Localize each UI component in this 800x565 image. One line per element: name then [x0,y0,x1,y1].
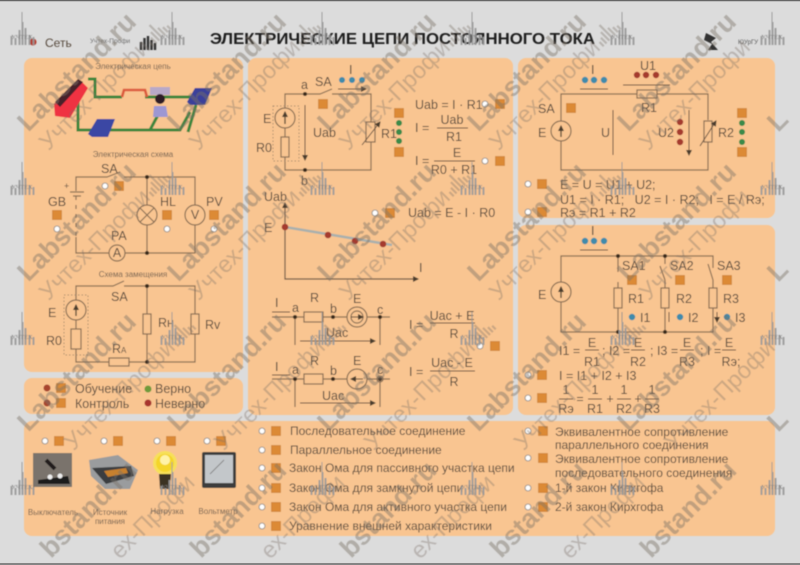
active section circuit 1: R [310,291,319,305]
parallel circuit: SA3 [717,259,741,273]
parallel circuit: R1 [628,292,644,306]
watermark overlay: Labstand: bstand.ru [484,455,592,563]
active section circuit 2 [272,354,473,407]
external characteristic graph: Uab [264,190,287,204]
component: switch: Выключатель [28,508,78,517]
current formulas: Rэ; [722,355,740,369]
logo watermarks: УЧТЕХ [311,184,333,191]
component: load lamp [150,436,184,516]
active section circuit 1: I [275,296,278,310]
header left: network indicator: Учтех-Профи [90,38,131,45]
logo watermarks: УЧТЕХ [611,184,633,191]
current formulas: R3 [679,355,695,369]
active section circuit 2: Uac [322,389,344,403]
current formulas: + [634,392,642,406]
watermark overlay: Учтех-Профи: Учтех-Профи [184,34,305,155]
watermark overlay: Учтех-Профи: Учтех-Профи [484,34,605,155]
panel: series connection [518,58,775,220]
logo watermarks: УЧТЕХ [161,34,183,41]
watermark overlay: Labstand: Labstand.ru [11,156,142,287]
current formulas: E [725,336,733,350]
current formulas: R1 [584,355,600,369]
logo watermarks: УЧТЕХ [461,484,483,491]
topics list left: Закон Ома для активного участка цепи [289,500,507,514]
electric circuit picture: Электрическая цепь [95,62,171,71]
topics list right: Эквивалентное сопротивление [555,425,729,439]
topics list right [525,425,732,514]
component: voltmeter: Вольтметр [198,507,238,516]
watermark overlay: Labstand: Labstand.ru [311,306,442,437]
topics list left: Закон Ома для замкнутой цепи [289,481,463,495]
watermark overlay: Учтех-Профи: ех-Профи [255,469,350,564]
active section circuit 2: Uac - E [431,356,473,370]
series circuit: SA [538,102,555,116]
formulas for load circuit: I = [415,121,429,135]
series circuit: E [538,126,546,140]
watermark overlay: Labstand: Labstand.ru [11,6,142,137]
electric schematic: PV [206,195,223,209]
equivalent schematic: E [48,306,56,320]
external characteristic graph: I [419,261,422,275]
current formulas: R3 [644,402,660,416]
logo watermarks: УЧТЕХ [11,334,33,341]
series formulas: U1 = I · R1; U2 = I · R2; I = E / Rэ; [560,193,765,207]
header left: network indicator: Сеть [45,36,72,50]
topics list right: параллельного соединения [555,438,709,452]
formulas for load circuit: Uab [441,113,464,127]
topics list left [259,424,515,533]
active section circuit 1: b [330,302,337,316]
watermark overlay: Учтех-Профи: Учтех-Профи [359,334,480,455]
logo watermarks: УЧТЕХ [761,184,783,191]
watermark overlay: Labstand: Labstand.ru [311,6,442,137]
logo watermarks: УЧТЕХ [761,334,783,341]
logo watermarks: УЧТЕХ [11,34,33,41]
active section circuit 2: b [330,364,337,378]
active section circuit 1 [272,291,500,350]
panel: parallel connection [518,224,775,416]
watermark overlay: Учтех-Профи: Учтех-Профи [634,34,755,155]
circuit with load R1: E [263,112,271,126]
circuit with load R1: R1 [381,127,397,141]
logo watermarks: УЧТЕХ [161,184,183,191]
current formulas: 1 [649,383,656,397]
panel: series circuit and Ohm laws [248,58,513,415]
logo watermarks: УЧТЕХ [461,34,483,41]
current formulas: 1 [563,383,570,397]
current formulas: = [576,392,584,406]
parallel circuit: SA1 [622,259,646,273]
topics list left: Уравнение внешней характеристики [289,519,492,533]
component: voltmeter [198,436,238,516]
series formulas: Rэ = R1 + R2 [560,206,636,220]
current formulas: E [588,336,596,350]
electric circuit picture [54,62,212,137]
logo watermarks: УЧТЕХ [461,334,483,341]
electric schematic: SA [101,162,118,176]
active section circuit 1: E [353,292,361,306]
equivalent schematic: SA [111,290,128,304]
circuit with load R1: SA [315,75,332,89]
current formulas: ; I = [700,344,721,358]
watermark overlay: Labstand: bstand.ru [34,455,142,563]
parallel circuit: I [591,224,594,238]
series formulas [525,178,765,220]
logo watermarks: УЧТЕХ [611,334,633,341]
active section circuit 2: I = [409,365,423,379]
circuit with load R1 [256,63,404,188]
header left: network indicator [30,36,155,50]
panel: mode legend: Верно [155,382,191,396]
watermark overlay: Labstand: Labstand.ru [461,306,592,437]
logo watermarks: УЧТЕХ [311,334,333,341]
electric schematic: GB [48,195,66,209]
active section circuit 2: R [310,354,319,368]
panel: mode legend: Обучение [75,382,132,396]
component: switch [28,436,78,517]
panel: mode legend [24,378,243,414]
logo watermarks: УЧТЕХ [611,34,633,41]
logo watermarks: УЧТЕХ [311,484,333,491]
watermark overlay: Labstand: Labstand.ru [311,156,442,287]
formulas for load circuit: E [453,146,461,160]
logo watermarks: УЧТЕХ [611,484,633,491]
logo watermarks: УЧТЕХ [461,184,483,191]
topics list left: Последовательное соединение [290,424,466,438]
electric schematic: Электрическая схема [93,150,174,159]
external characteristic graph: E [264,221,272,235]
circuit with load R1: b [301,174,308,188]
electric schematic: PA [111,229,127,243]
logo watermarks: УЧТЕХ [311,34,333,41]
watermark overlay: Labstand: Labstand.ru [161,156,292,287]
logo watermarks: УЧТЕХ [161,484,183,491]
panel: mode legend: Неверно [155,397,205,411]
formulas for load circuit: R1 [446,130,462,144]
topics list left: Параллельное соединение [290,443,442,457]
watermark overlay: Labstand: Labstand.ru [161,306,292,437]
equivalent schematic: Rн [158,316,174,330]
current formulas [525,336,740,416]
current formulas: Rэ [558,402,574,416]
title: ЭЛЕКТРИЧЕСКИЕ ЦЕПИ ПОСТОЯННОГО ТОКА [210,31,595,48]
parallel circuit: R3 [723,292,739,306]
watermark overlay: Учтех-Профи: Учтех-Профи [334,34,455,155]
watermark overlay: Labstand: Labstand.ru [461,156,592,287]
active section circuit 1: Uac + E [430,309,474,323]
logo watermarks: УЧТЕХ [11,484,33,491]
logo watermarks: УЧТЕХ [11,184,33,191]
external characteristic graph [264,190,495,279]
topics list left: Закон Ома для пассивного участка цепи [289,461,515,475]
circuit with load R1: R0 [256,141,272,155]
equivalent schematic: RA [112,342,127,356]
series circuit: R2 [718,126,734,140]
current formulas: 1 [592,383,599,397]
parallel circuit: E [538,288,546,302]
current formulas: ; I3 = [650,344,678,358]
current formulas: R2 [630,355,646,369]
watermark overlay: Labstand: Labstand.ru [461,6,592,137]
component: power source: питания [95,517,125,526]
series circuit: I [591,63,594,77]
watermark overlay: Учтех-Профи: Учтех-Профи [659,334,780,455]
formulas for load circuit [415,98,504,371]
current formulas: ; I2 = [602,344,630,358]
active section circuit 2: I [275,360,278,374]
electric schematic: + [64,181,69,191]
watermark overlay: Учтех-Профи: Учтех-Профи [484,184,605,305]
panel: mode legend: Контроль [75,397,129,411]
watermark overlay: Labstand: L [761,404,794,437]
series circuit [538,59,746,170]
parallel circuit: I2 [688,311,698,325]
current formulas: R2 [616,402,632,416]
watermark overlay: Labstand: bstand.ru [334,455,442,563]
circuit with load R1: Uab [313,126,336,140]
watermark overlay: Labstand: L [761,254,794,287]
equivalent schematic: R0 [46,334,62,348]
logo watermarks: УЧТЕХ [161,334,183,341]
topics list right: Эквивалентное сопротивление [555,452,729,466]
electric schematic [48,150,223,261]
component: power source [89,436,138,526]
watermark overlay: Учтех-Профи: Учтех-Профи [184,184,305,305]
external characteristic graph: Uab = E - I · R0 [408,206,495,220]
active section circuit 2: c [377,363,383,377]
current formulas: I1 = [559,344,580,358]
topics list right: последовательного соединения [555,466,732,480]
parallel circuit: SA2 [670,259,694,273]
active section circuit 1: c [377,303,383,317]
equivalent schematic [46,270,221,366]
component: power source: Источник [93,508,128,517]
series circuit: U [601,126,610,140]
watermark overlay: Labstand: bstand.ru [184,455,292,563]
header right: university logo: ЮУрГУ [738,40,758,46]
watermark overlay: Учтех-Профи: Учтех-Профи [34,184,155,305]
watermark overlay: Labstand: Labstand.ru [611,6,742,137]
logo watermarks: УЧТЕХ [761,34,783,41]
watermark overlay: Labstand: bstand.ru [634,455,742,563]
equivalent schematic: Схема замещения [99,270,167,279]
series formulas: E = U = U1 + U2; [560,178,656,192]
panel: circuit diagrams [24,58,243,372]
active section circuit 1: a [292,301,299,315]
parallel circuit: R2 [676,292,692,306]
formulas for load circuit: R0 + R1 [431,163,477,177]
watermark overlay: Учтех-Профи: Учтех-Профи [59,334,180,455]
active section circuit 1: I = [409,318,423,332]
series circuit: U2 [658,126,674,140]
watermark overlay: Учтех-Профи: Учтех-Профи [634,184,755,305]
equivalent schematic: Rv [205,318,221,332]
watermark overlay: Labstand: Labstand.ru [11,306,142,437]
watermark overlay: Labstand: Labstand.ru [611,306,742,437]
watermark overlay: Учтех-Профи: Учтех-Профи [334,184,455,305]
current formulas: I = I1 + I2 + I3 [559,369,637,383]
logo watermarks: УЧТЕХ [761,484,783,491]
parallel circuit: I3 [735,311,745,325]
active section circuit 2: E [353,354,361,368]
watermark overlay: Учтех-Профи: ех-Профи [555,469,650,564]
watermark overlay: Учтех-Профи: ех-Профи [105,469,200,564]
electric schematic: V [191,208,200,222]
header right: university logo [704,33,758,50]
parallel circuit [538,224,745,334]
series circuit: R1 [641,101,657,115]
watermark overlay: Labstand: Labstand.ru [161,6,292,137]
watermark overlay: Labstand: L [761,104,794,137]
current formulas: E [683,336,691,350]
topics list right: 1-й закон Кирхгофа [555,481,664,495]
current formulas: 1 [621,383,628,397]
component: load lamp: Нагрузка [150,507,184,516]
active section circuit 1: Uac [326,326,348,340]
current formulas: R1 [587,402,603,416]
electric schematic: A [113,246,122,260]
topics list right: 2-й закон Кирхгофа [555,500,664,514]
current formulas: + [606,392,614,406]
active section circuit 2: a [292,363,299,377]
watermark overlay: Учтех-Профи: Учтех-Профи [209,334,330,455]
active section circuit 2: R [449,375,459,389]
circuit with load R1: I [349,63,352,77]
circuit with load R1: a [301,78,308,92]
series circuit: U1 [640,59,656,73]
panel: components and topics [24,421,775,536]
watermark overlay: Labstand: Labstand.ru [611,156,742,287]
watermark overlay: Учтех-Профи: Учтех-Профи [509,334,630,455]
watermark overlay: Учтех-Профи: Учтех-Профи [34,34,155,155]
formulas for load circuit: Uab = I · R1 [415,98,483,112]
formulas for load circuit: I = [415,154,429,168]
active section circuit 1: R [449,327,459,341]
watermark overlay: Учтех-Профи: ех-Профи [405,469,500,564]
parallel circuit: I1 [640,311,650,325]
current formulas: E [634,336,642,350]
electric schematic: HL [160,195,176,209]
